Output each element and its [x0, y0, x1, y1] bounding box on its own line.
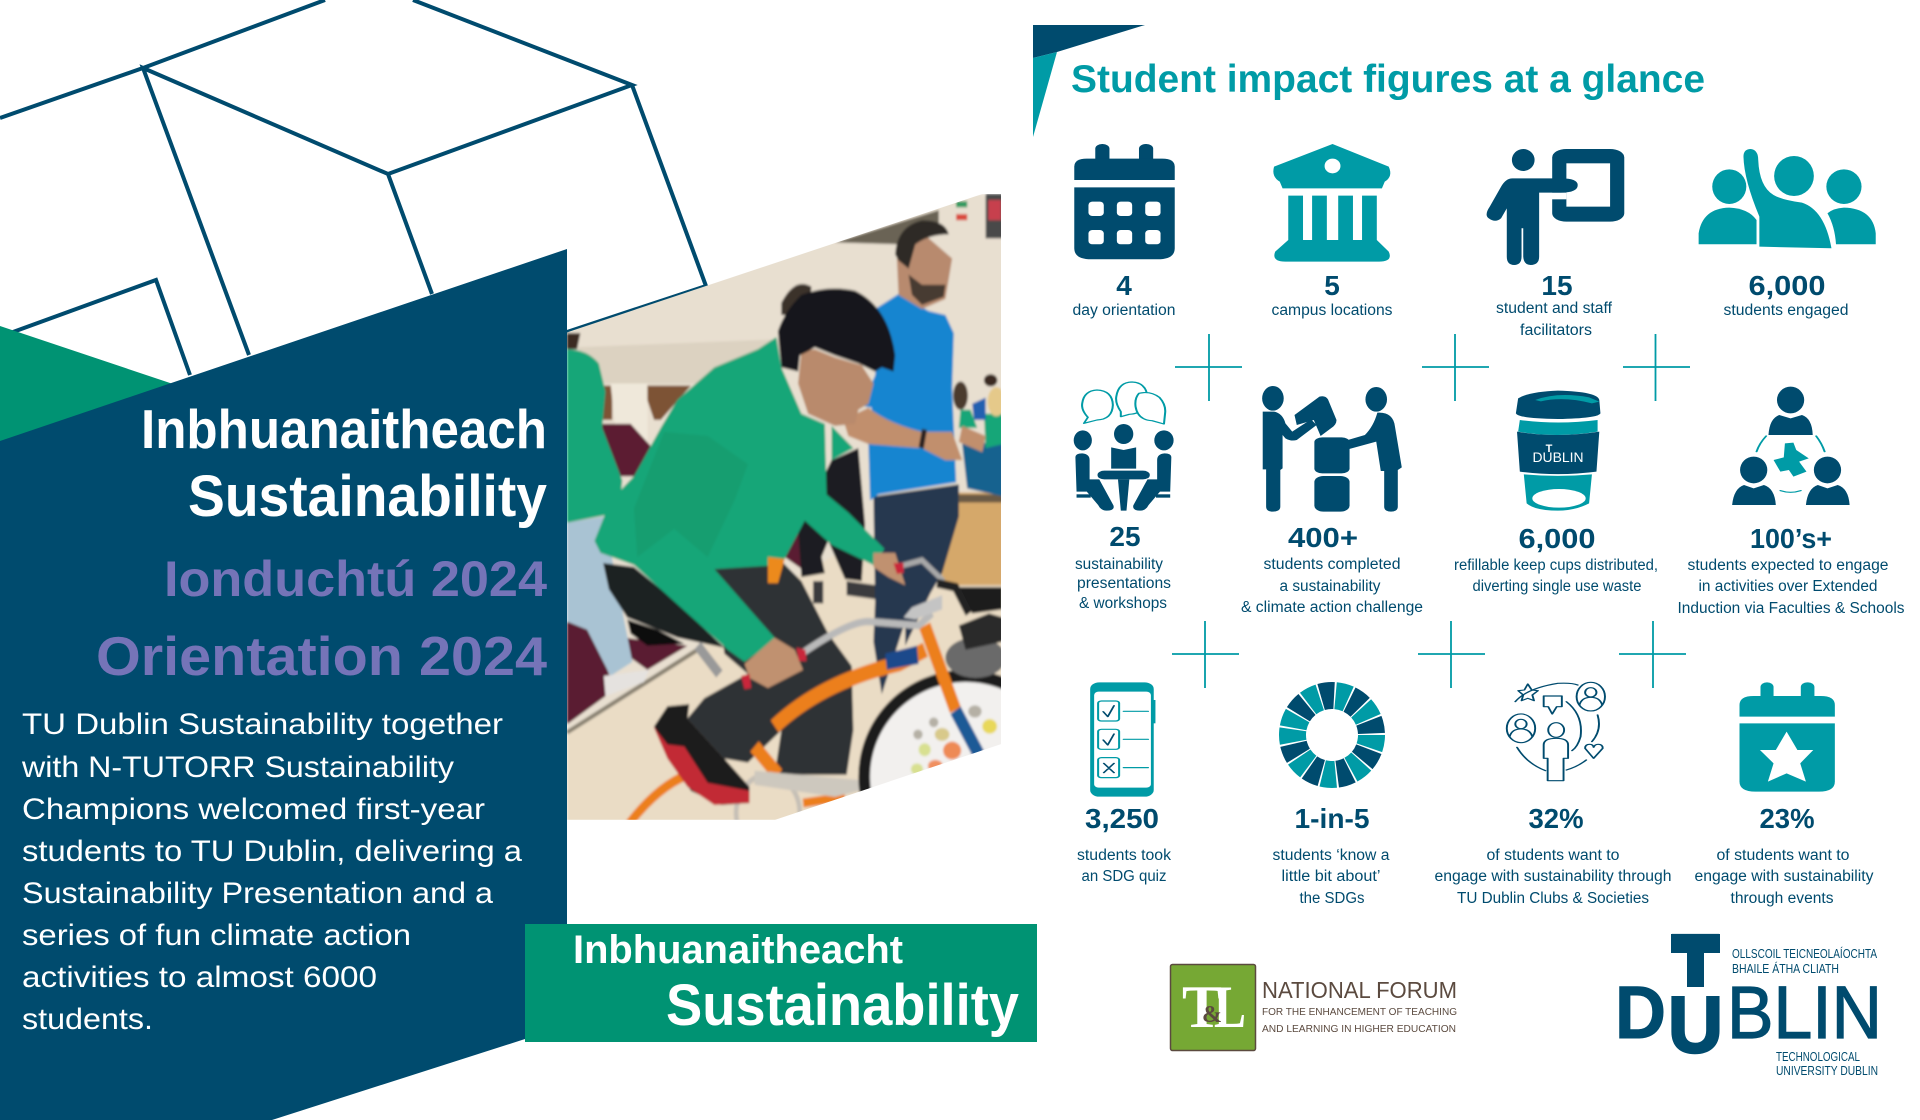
icon: phone quiz checklist — [1090, 682, 1155, 797]
body paragraph: students to TU Dublin, delivering a — [22, 835, 522, 868]
stat: 100's+ students expected: 100’s+ — [1750, 523, 1832, 554]
stat: 3,250 SDG quiz — [1077, 803, 1171, 885]
icon: student surrounded by interests — [1507, 682, 1605, 781]
stat: 100's+ students expected: students expected to engage — [1688, 557, 1888, 574]
stat: 400+ students completed: 400+ — [1288, 522, 1358, 553]
stat: 32% clubs and societies: engage with sustainability through — [1434, 868, 1672, 885]
stat: 25 presentations and workshops: presentations — [1077, 575, 1171, 592]
stat: 23% events — [1694, 803, 1874, 907]
body paragraph: TU Dublin Sustainability together — [22, 708, 503, 741]
icon: group with raised hand — [1699, 149, 1876, 248]
logo: TU Dublin: T — [1671, 918, 1720, 1004]
stat: 1-in-5 know about SDGs: the SDGs — [1300, 890, 1365, 907]
icon: facilitator at board — [1487, 149, 1624, 265]
stat: 6,000 students engaged — [1724, 270, 1848, 319]
stat: 400+ students completed: & climate action challenge — [1241, 599, 1423, 616]
stat: 32% clubs and societies: 32% — [1528, 803, 1584, 834]
corner flag accent — [1033, 25, 1145, 137]
stat: 5 campus locations: campus locations — [1272, 302, 1393, 319]
icon: keep cup: DUBLIN — [1532, 449, 1584, 465]
green banner — [525, 924, 1037, 1042]
stat: 25 presentations and workshops — [1075, 521, 1171, 612]
subtitle: Ionduchtú 2024: Ionduchtú 2024 — [164, 551, 547, 607]
subtitle: Orientation 2024: Orientation 2024 — [96, 625, 547, 687]
stat: 6,000 students engaged: students engaged — [1724, 302, 1848, 319]
icon: presentations and workshops — [1074, 382, 1174, 511]
icon: keep cup: T — [1546, 443, 1553, 455]
icon: keep cup — [1516, 391, 1600, 511]
stat: 5 campus locations: 5 — [1324, 270, 1340, 301]
logo: TU Dublin: BLIN — [1727, 971, 1882, 1054]
heading: student impact figures: Student impact figures at a glance — [1071, 58, 1705, 101]
stat: 15 student and staff facilitators: 15 — [1541, 270, 1573, 301]
icon: team puzzle — [1732, 387, 1850, 505]
logo: TU Dublin — [1615, 918, 1882, 1078]
body paragraph: with N-TUTORR Sustainability — [21, 751, 454, 784]
navy title panel — [0, 249, 567, 1120]
icon: SDG wheel — [1283, 686, 1381, 784]
logo: National Forum: L — [1214, 974, 1246, 1040]
stat: 23% events: through events — [1730, 890, 1834, 907]
green banner: Inbhuanaitheacht — [573, 928, 903, 972]
stat: 1-in-5 know about SDGs: little bit about’ — [1282, 868, 1380, 885]
stat: 15 student and staff facilitators: student and staff — [1496, 300, 1613, 317]
stat: 23% events: of students want to — [1716, 847, 1850, 864]
stat: 100's+ students expected: Induction via Faculties & Schools — [1678, 600, 1905, 617]
icon: calendar — [1074, 144, 1175, 259]
stat: 6,000 keep cups: diverting single use waste — [1472, 578, 1642, 595]
stat: 6,000 keep cups — [1454, 523, 1658, 595]
stat: 4 day orientation: 4 — [1116, 270, 1132, 301]
body paragraph: series of fun climate action — [22, 919, 411, 952]
stat: 6,000 keep cups: 6,000 — [1518, 523, 1596, 554]
logo: National Forum: NATIONAL FORUM — [1262, 977, 1457, 1003]
icon: people stacking blocks — [1262, 386, 1402, 512]
stat: 4 day orientation: day orientation — [1072, 302, 1176, 319]
title: Inbhuanaitheach: Inbhuanaitheach — [141, 398, 547, 460]
stat: 3,250 SDG quiz: students took — [1077, 847, 1171, 864]
stat: 6,000 students engaged: 6,000 — [1748, 270, 1826, 301]
logo: TU Dublin: TECHNOLOGICAL — [1776, 1049, 1860, 1064]
stat: 15 student and staff facilitators: facilitators — [1520, 322, 1592, 339]
logo: National Forum: FOR THE ENHANCEMENT OF TEACHING — [1262, 1006, 1457, 1018]
logo: National Forum: & — [1202, 1002, 1222, 1028]
logo: National Forum: T — [1182, 974, 1222, 1040]
stat: 23% events: engage with sustainability — [1694, 868, 1874, 885]
green triangle accent — [0, 326, 176, 445]
stat: 3,250 SDG quiz: an SDG quiz — [1082, 868, 1166, 885]
logo: TU Dublin: D — [1615, 971, 1666, 1054]
icon: calendar with star — [1740, 682, 1835, 792]
stat: 400+ students completed: students completed — [1264, 556, 1400, 573]
stat: 3,250 SDG quiz: 3,250 — [1085, 803, 1159, 834]
stat: 5 campus locations — [1272, 270, 1393, 319]
stat: 32% clubs and societies: TU Dublin Clubs & Societies — [1457, 890, 1649, 907]
stat: 32% clubs and societies: of students want to — [1486, 847, 1620, 864]
stat: 400+ students completed — [1241, 522, 1423, 616]
stat: 25 presentations and workshops: sustainability — [1075, 556, 1163, 573]
stat: 25 presentations and workshops: 25 — [1109, 521, 1141, 552]
stat: 4 day orientation — [1072, 270, 1176, 319]
stat: 6,000 keep cups: refillable keep cups distributed, — [1454, 557, 1658, 574]
logo: TU Dublin: U — [1668, 980, 1723, 1069]
stat: 32% clubs and societies — [1434, 803, 1672, 907]
body paragraph: Sustainability Presentation and a — [22, 877, 493, 910]
logo: National Forum: AND LEARNING IN HIGHER EDUCATION — [1262, 1023, 1456, 1035]
stat: 1-in-5 know about SDGs: students ‘know a — [1272, 847, 1390, 864]
body paragraph: activities to almost 6000 — [22, 961, 377, 994]
logo: TU Dublin: UNIVERSITY DUBLIN — [1776, 1063, 1878, 1078]
stat: 23% events: 23% — [1760, 803, 1815, 834]
logo: TU Dublin: OLLSCOIL TEICNEOLAÍOCHTA — [1732, 946, 1877, 961]
body paragraph: Champions welcomed first-year — [22, 793, 485, 826]
stat: 15 student and staff facilitators — [1496, 270, 1613, 339]
green banner: Sustainability — [666, 973, 1019, 1038]
stat: 1-in-5 know about SDGs: 1-in-5 — [1294, 803, 1370, 834]
body paragraph — [21, 708, 522, 1036]
icon: campus building — [1273, 144, 1390, 262]
body paragraph: students. — [22, 1003, 153, 1036]
stat: 1-in-5 know about SDGs — [1272, 803, 1390, 907]
stat: 400+ students completed: a sustainability — [1280, 578, 1381, 595]
stat: 25 presentations and workshops: & workshops — [1079, 595, 1167, 612]
logo: National Forum — [1170, 964, 1457, 1050]
stat: 100's+ students expected: in activities over Extended — [1698, 578, 1878, 595]
photo: student on a smoothie bike — [567, 194, 1001, 820]
logo: TU Dublin: BHAILE ÁTHA CLIATH — [1732, 961, 1839, 976]
title: Sustainability: Sustainability — [188, 464, 547, 529]
stat: 100's+ students expected — [1678, 523, 1905, 617]
